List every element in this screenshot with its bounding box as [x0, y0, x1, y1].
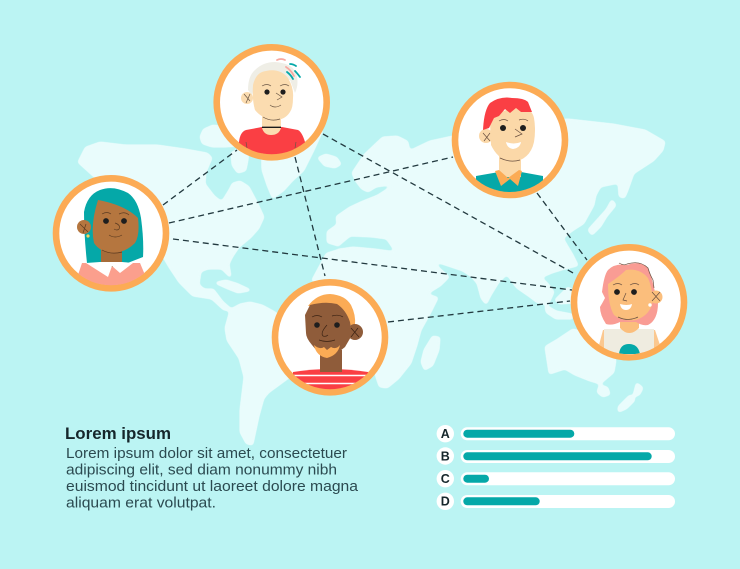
- avatar: left person with teal hair: [56, 178, 166, 295]
- avatar: top person with white hair: [217, 47, 327, 165]
- bar A: A: [441, 427, 450, 441]
- heading: Lorem ipsum: [65, 424, 171, 443]
- line: upper right to right: [537, 193, 587, 260]
- north america: [79, 143, 263, 310]
- line: left to top: [163, 150, 237, 205]
- line: top to bottom: [295, 157, 325, 276]
- bar chart: [437, 425, 675, 510]
- baffin island: [232, 146, 248, 172]
- body text: adipiscing elit, sed diam nonummy nibh: [66, 462, 337, 478]
- cuba: [217, 281, 249, 292]
- new zealand: [619, 384, 642, 411]
- africa: [313, 248, 437, 387]
- world map: [79, 120, 664, 444]
- body text: [66, 446, 359, 512]
- text block: [65, 424, 359, 512]
- australia: [546, 330, 615, 383]
- line: top to right: [323, 134, 575, 274]
- eurasia: [328, 120, 664, 303]
- avatar: right person with pink hair: [574, 247, 684, 360]
- greenland: [262, 130, 322, 197]
- tasmania: [598, 386, 609, 396]
- body text: aliquam erat volutpat.: [66, 496, 216, 512]
- madagascar: [422, 337, 439, 369]
- line: bottom to right: [388, 301, 570, 322]
- body text: euismod tincidunt ut laoreet dolore magna: [66, 479, 359, 495]
- philippines and borneo: [556, 288, 574, 303]
- south america: [226, 303, 300, 444]
- avatar: upper right person with red hair: [455, 85, 565, 200]
- dashed connection lines: [163, 134, 587, 322]
- bar B: [437, 447, 675, 465]
- bar D: [437, 493, 675, 510]
- line: left to upper right: [169, 157, 453, 223]
- indonesia: [546, 306, 572, 318]
- line: left to right: [173, 239, 572, 290]
- japan: [589, 201, 615, 234]
- bar B: B: [441, 449, 450, 463]
- infographic canvas: [52, 44, 688, 510]
- iceland: [319, 155, 340, 167]
- body text: Lorem ipsum dolor sit amet, consectetuer: [66, 446, 347, 462]
- bar C: [437, 470, 675, 487]
- bar A: [437, 425, 675, 442]
- arctic islands: [201, 126, 240, 146]
- avatar: bottom person with orange hair and beard: [275, 282, 385, 400]
- bar D: D: [441, 495, 450, 509]
- bar C: C: [441, 472, 450, 486]
